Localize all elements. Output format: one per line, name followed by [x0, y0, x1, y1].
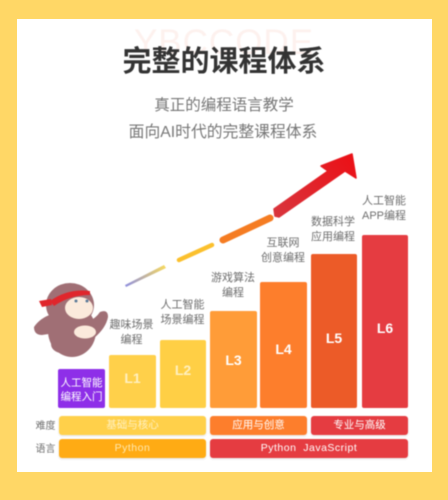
label: L3: 编程 [222, 286, 244, 298]
label: L1: 趣味场景 [110, 319, 154, 331]
label: L3 [211, 271, 255, 298]
bar: L4: L4 [275, 341, 292, 357]
label: L4: 互联网 [266, 237, 300, 249]
label: L2: 人工智能 [160, 299, 204, 311]
difficulty: advanced [311, 416, 408, 435]
label: L5: 应用编程 [311, 230, 355, 242]
difficulty: applied: 应用与创意 [232, 419, 285, 431]
bar: L6 [362, 235, 408, 408]
bar: L5: L5 [326, 330, 342, 346]
bar: L6: L6 [377, 320, 393, 336]
bar: L2 [160, 340, 206, 408]
label: L4 [261, 236, 306, 264]
label: L3: 游戏算法 [211, 272, 255, 284]
title: 完整的课程体系 [122, 46, 326, 78]
language: Python [59, 439, 206, 458]
label: L6 [362, 194, 406, 222]
label: difficulty: 难度 [36, 421, 56, 432]
language: Python: Python [115, 442, 150, 454]
bar: intro level [58, 369, 105, 408]
bar: intro level: 编程入门 [60, 391, 102, 403]
label: L4: 创意编程 [261, 252, 305, 264]
bar: L3 [210, 311, 257, 408]
difficulty: applied [210, 416, 307, 435]
language: Python JavaScript [210, 439, 408, 458]
label: L2: 场景编程 [160, 314, 204, 326]
bar: L3: L3 [225, 352, 242, 368]
label: L5: 数据科学 [311, 216, 355, 228]
label: L1 [109, 318, 154, 346]
label: L6: 人工智能 [362, 195, 406, 207]
label: L1: 编程 [120, 334, 142, 346]
bar: L5 [311, 254, 357, 408]
difficulty: basic: 基础与核心 [106, 419, 159, 431]
watermark: YBCCODE [134, 23, 314, 62]
label: L5 [311, 215, 356, 242]
label: L6: APP编程 [362, 210, 406, 222]
label: L2 [160, 298, 205, 326]
bar: intro level: 人工智能 [60, 377, 102, 389]
subtitle line 2: 面向AI时代的完整课程体系 [129, 124, 317, 141]
difficulty: basic [59, 416, 206, 435]
language: Python JavaScript: Python JavaScript [261, 442, 357, 454]
label: language: 语言 [36, 444, 56, 455]
bar: L1: L1 [124, 370, 141, 386]
icon: monkey mascot with red headband [33, 282, 109, 358]
subtitle line 1: 真正的编程语言教学 [154, 97, 294, 114]
difficulty: advanced: 专业与高级 [333, 419, 386, 431]
bar: L1 [109, 355, 156, 408]
bar: L2: L2 [175, 362, 191, 378]
bar: L4 [260, 282, 307, 408]
